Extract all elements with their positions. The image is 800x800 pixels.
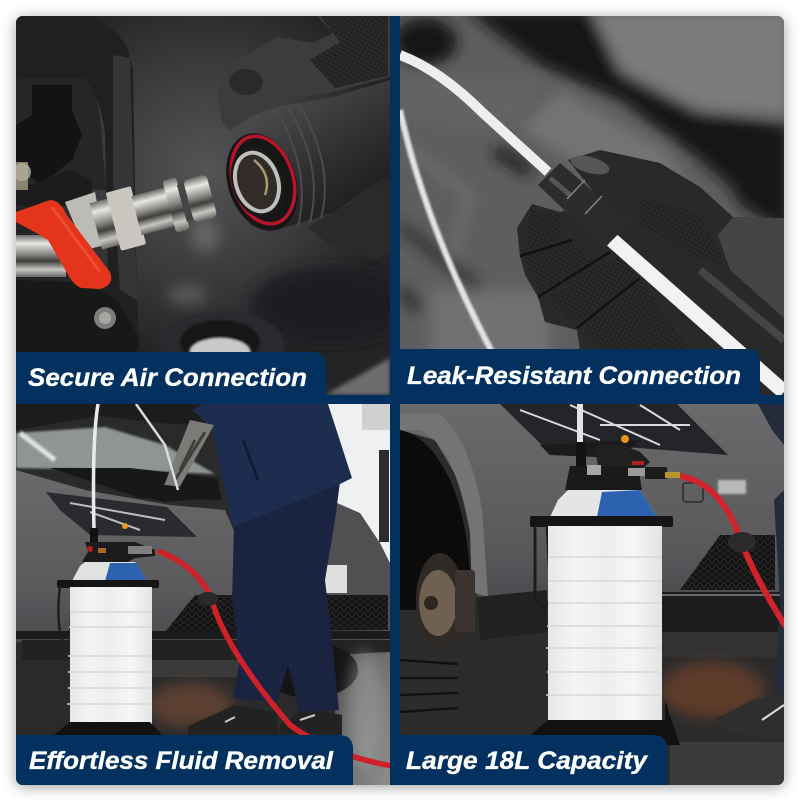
recessed ring	[180, 314, 284, 352]
car body	[16, 470, 240, 642]
label: Effortless Fluid Removal	[16, 735, 353, 785]
headlight	[500, 404, 728, 455]
white tube, left	[400, 110, 492, 352]
white extractor tube	[577, 404, 583, 444]
fluid extractor jug	[54, 562, 162, 735]
red air hose	[680, 476, 786, 627]
panel: secure air connection photo	[13, 16, 410, 395]
red air hose	[158, 551, 392, 766]
black glove	[217, 16, 390, 260]
lower grille	[680, 535, 775, 590]
screw	[94, 307, 116, 329]
headlight	[46, 492, 197, 537]
pump head fittings	[82, 528, 155, 562]
brass bolt	[16, 163, 31, 181]
panel: large 18L capacity photo	[400, 404, 786, 785]
label: Secure Air Connection	[16, 352, 326, 396]
label: Large 18L Capacity	[400, 735, 667, 785]
glove: hand	[517, 150, 784, 395]
tyre	[400, 658, 458, 714]
panel: effortless fluid removal photo	[16, 404, 392, 785]
threaded coupling and air plug	[90, 175, 216, 250]
pump body plastic	[52, 86, 106, 190]
brake disc	[416, 553, 475, 636]
black bracket	[16, 16, 140, 352]
silver valve body	[16, 235, 66, 277]
mechanic	[143, 404, 352, 735]
label: Secure Air Connection: Secure Air Connection	[28, 364, 307, 392]
workshop wall	[328, 404, 390, 563]
label: Large 18L Capacity: Large 18L Capacity	[406, 747, 648, 775]
bumper grille	[165, 595, 388, 632]
floor reflection	[660, 662, 764, 718]
pump head fittings	[565, 442, 680, 490]
label: Leak-Resistant Connection: Leak-Resistant Connection	[407, 362, 741, 390]
panel: leak-resistant connection photo	[393, 10, 790, 395]
floor reflection	[148, 683, 232, 727]
white tube, lower	[612, 240, 784, 392]
open bonnet and windscreen	[16, 404, 215, 430]
label: Effortless Fluid Removal: Effortless Fluid Removal	[29, 747, 334, 775]
mechanic leg and shoe	[713, 404, 784, 740]
quick-release socket	[226, 80, 390, 231]
floor right	[335, 650, 390, 785]
white tube, main	[400, 55, 548, 172]
red valve handle	[16, 200, 111, 289]
fluid extractor jug	[527, 490, 680, 748]
fender detail	[683, 483, 703, 502]
label: Leak-Resistant Connection	[400, 349, 760, 396]
wheel arch	[400, 430, 472, 610]
extractor tube, white	[94, 404, 98, 530]
car body	[400, 404, 784, 605]
black tube connector	[538, 163, 618, 244]
